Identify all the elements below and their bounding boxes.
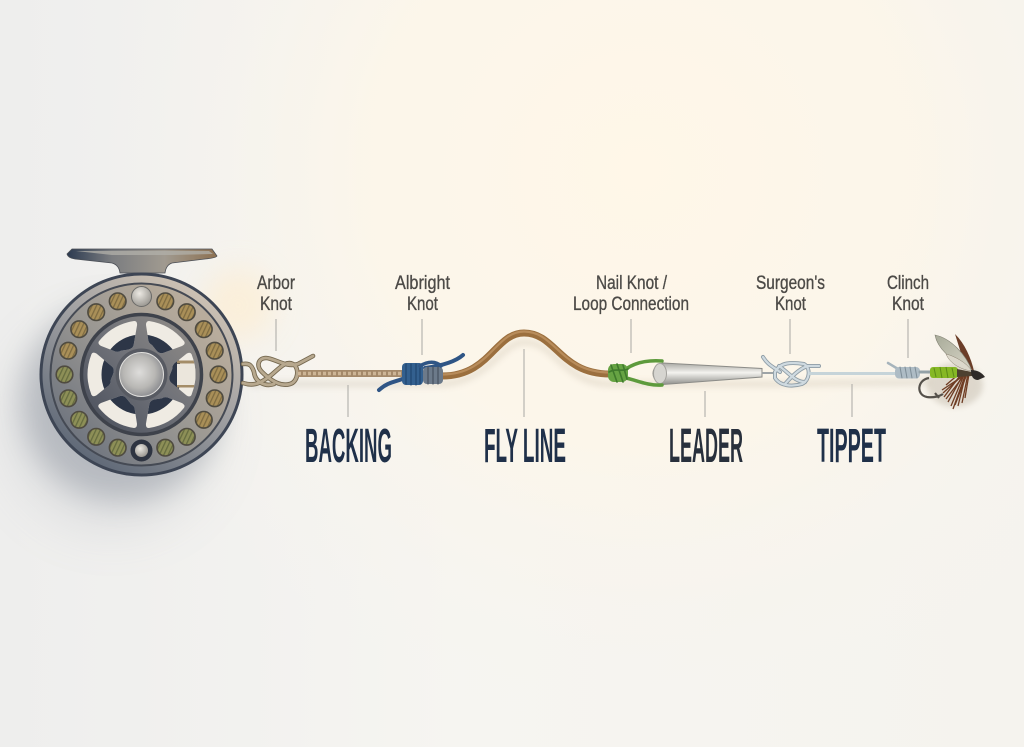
label: Surgeon's Knot [756, 272, 825, 315]
surgeon's knot outline [763, 357, 819, 386]
leader taper [653, 363, 775, 384]
reel spoke disc [82, 314, 202, 434]
label: Arbor Knot: Knot [260, 293, 292, 315]
reel top knob [132, 286, 152, 306]
label: Arbor Knot: Arbor [257, 272, 295, 294]
surgeon's knot [763, 357, 819, 386]
line shadow [250, 342, 930, 384]
fly body [930, 367, 972, 378]
fly wing [935, 334, 974, 371]
reel bottom screw [130, 440, 152, 462]
albright knot [379, 355, 463, 390]
label: Arbor Knot [257, 272, 295, 315]
infographic canvas: FLY LINE [484, 420, 566, 473]
reel spool seen through windows [102, 335, 196, 414]
label: Nail Knot / Loop Connection [573, 272, 689, 315]
label: Clinch Knot [887, 272, 929, 315]
arbor knot strands [243, 356, 313, 385]
label: Albright Knot [395, 272, 450, 315]
tippet line [809, 372, 896, 375]
reel handle foot [67, 249, 217, 273]
fly shadow [927, 363, 983, 407]
nail knot and loop connection [608, 361, 662, 385]
label: Clinch Knot: Knot [892, 293, 924, 315]
label: Clinch Knot: Clinch [887, 272, 929, 294]
fly hackle [942, 373, 969, 409]
arbor knot [243, 356, 313, 385]
infographic canvas: LEADER [669, 420, 743, 473]
reel ports with line [56, 293, 227, 456]
surgeon's knot strands [763, 357, 819, 386]
infographic canvas [0, 0, 985, 544]
fly line [442, 332, 610, 376]
label: Nail Knot / Loop Connection: Loop Connection [573, 293, 689, 315]
label: Nail Knot / Loop Connection: Nail Knot / [596, 272, 667, 294]
label: Albright Knot: Albright [395, 272, 450, 294]
icon: fly reel [40, 249, 244, 476]
label: Albright Knot: Knot [407, 293, 438, 315]
backing line [298, 370, 404, 377]
fly head [971, 370, 985, 380]
fly hook [919, 378, 943, 398]
reel frame [40, 272, 244, 476]
infographic canvas: BACKING [305, 420, 392, 473]
clinch knot [888, 363, 931, 378]
pointer lines [276, 319, 908, 417]
infographic canvas: TIPPET [817, 420, 886, 473]
label: Surgeon's Knot: Knot [775, 293, 806, 315]
reel hub [116, 348, 168, 400]
arbor knot outline [243, 356, 313, 385]
reel windows [74, 310, 209, 439]
icon: trout fly [919, 334, 985, 409]
reel shadow and glow [12, 269, 274, 525]
label: Surgeon's Knot: Surgeon's [756, 272, 825, 294]
